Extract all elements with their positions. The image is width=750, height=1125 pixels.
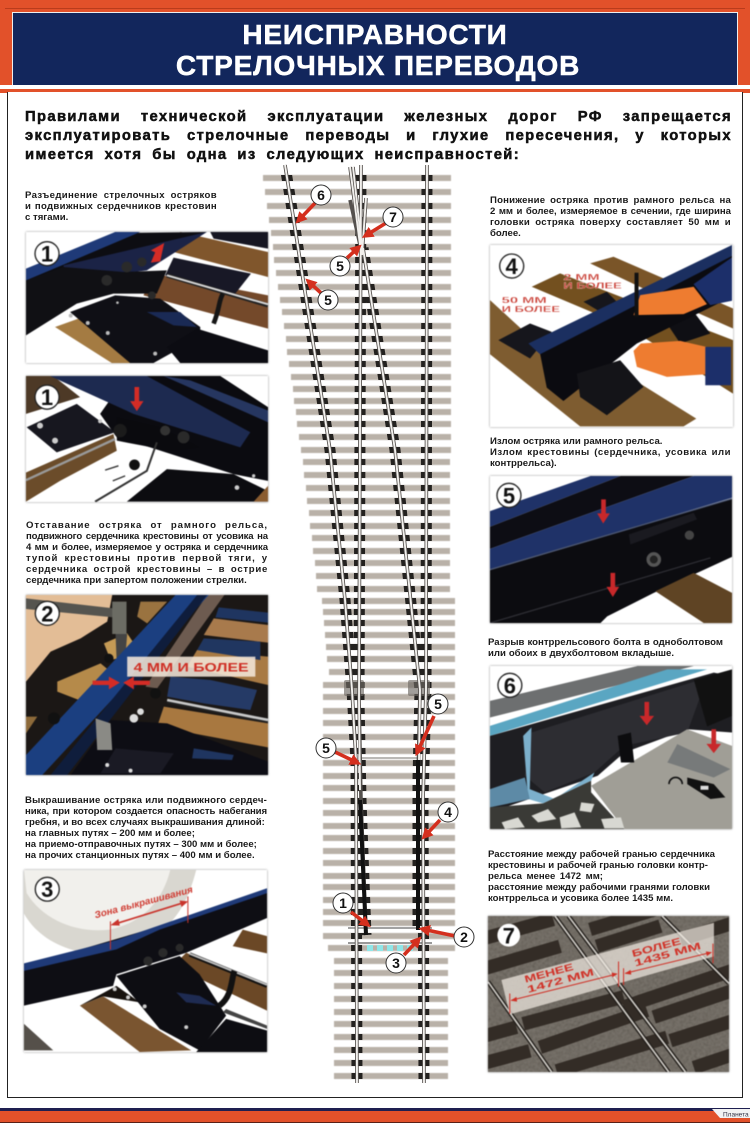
measurement arrows xyxy=(510,944,713,1014)
bottom band xyxy=(0,1108,750,1123)
text: defect 5: Излом остряка или рамного рельса. xyxy=(490,436,662,447)
badge 4 xyxy=(500,254,524,279)
text: defect 3: Выкрашивание остряка или подвижного сердеч- xyxy=(25,795,267,806)
measurement label: 4 ММ И БОЛЕЕ xyxy=(134,662,249,675)
text: defect 2: сердечника острой крестовины – в острие xyxy=(26,564,268,575)
photo 7 xyxy=(488,916,729,1072)
text: defect 6: Разрыв контррельсового болта в одноболтовом xyxy=(488,637,723,648)
text: defect 6 xyxy=(488,637,723,659)
callout numbers: 5 xyxy=(324,292,332,308)
badge 7: 7 xyxy=(503,923,515,948)
measurement labels: И БОЛЕЕ xyxy=(563,280,623,290)
badge 5 xyxy=(497,483,521,508)
badge 2 xyxy=(35,601,59,626)
top orange frame xyxy=(0,0,750,93)
text: defect 4: Понижение остряка против рамного рельса на xyxy=(490,195,731,206)
measurement labels: 2 ММ xyxy=(563,272,600,282)
callout numbers: 3 xyxy=(392,955,400,971)
text: defect 1 xyxy=(25,190,217,223)
text: defect 3: на приемо-отправочных путях – 300 мм и более; xyxy=(25,839,257,850)
text: defect 7: крестовины и рабочей гранью головки контр- xyxy=(488,860,708,871)
photo 1b xyxy=(26,376,268,502)
badge 3: 3 xyxy=(41,877,53,902)
callout numbers xyxy=(317,187,468,971)
measurement labels xyxy=(523,936,702,996)
arrow xyxy=(151,243,164,263)
text: defect 2: 4 мм и более, измеряемое у остряка и сердечника xyxy=(26,542,268,553)
text: defect 6: или обоих в двухболтовом вкладыше. xyxy=(488,648,674,659)
measurement labels: 50 ММ xyxy=(502,295,547,305)
publisher logo: Планета xyxy=(723,1112,749,1118)
text: defect 2: подвижного сердечника крестовины от усовика на xyxy=(26,531,268,542)
sleepers xyxy=(263,175,455,1079)
text: defect 1: с тягами. xyxy=(25,212,68,223)
track diagram xyxy=(262,164,474,1083)
callout numbers: 5 xyxy=(336,258,344,274)
measurement label xyxy=(127,657,255,677)
text: defect 5: Излом крестовины (сердечника, усовика или xyxy=(490,447,731,458)
text: defect 4 xyxy=(490,195,731,239)
callout numbers: 1 xyxy=(339,895,347,911)
callout numbers: 6 xyxy=(317,187,325,203)
text: defect 3: ника, при котором создается опасность набегания xyxy=(25,806,267,817)
callout numbers: 5 xyxy=(434,696,442,712)
callout numbers: 7 xyxy=(389,209,397,225)
measurement arrows xyxy=(93,677,150,689)
text: defect 4: головки остряка поверху составляет 50 мм и xyxy=(490,217,731,228)
photo 1a xyxy=(26,232,268,363)
text: defect 2: тупой крестовины против первой тяги, у xyxy=(26,553,268,564)
badge 6 xyxy=(498,673,522,698)
badge 1 xyxy=(35,242,59,267)
text: defect 7: Расстояние между рабочей гранью сердечника xyxy=(488,849,715,860)
arrow xyxy=(130,387,143,411)
title line strip xyxy=(0,85,750,89)
text: defect 2 xyxy=(26,520,268,586)
callout numbers: 4 xyxy=(444,804,452,820)
chipping zone annotation xyxy=(93,884,195,949)
marker dots xyxy=(367,945,413,951)
title xyxy=(176,19,580,82)
intro text: Правилами технической эксплуатации железных дорог РФ запрещается xyxy=(25,109,732,125)
text: defect 2: сердечника при запертом положении стрелки. xyxy=(26,575,247,586)
badge 1 xyxy=(35,385,59,410)
badge 1: 1 xyxy=(41,242,53,267)
publisher logo xyxy=(712,1109,750,1118)
callout arrows xyxy=(298,200,455,955)
text: defect 5: контррельса). xyxy=(490,458,557,469)
photo 5 xyxy=(490,476,732,623)
title: СТРЕЛОЧНЫХ ПЕРЕВОДОВ xyxy=(176,50,580,81)
photo 2 xyxy=(26,595,268,775)
text: defect 3: на главных путях – 200 мм и более; xyxy=(25,828,195,839)
measurement labels xyxy=(502,272,623,314)
text: defect 4: более. xyxy=(490,228,521,239)
rail fasteners xyxy=(285,165,427,1083)
measurement labels: БОЛЕЕ xyxy=(631,936,683,960)
badge 6: 6 xyxy=(504,673,516,698)
badge 4: 4 xyxy=(506,254,519,279)
arrows xyxy=(640,702,721,753)
cross rods xyxy=(348,758,432,943)
measurement labels: 1472 ММ xyxy=(526,967,595,996)
measurement band xyxy=(501,923,714,1014)
rails xyxy=(285,165,427,1083)
text: defect 7: расстояние между рабочими гранями головки xyxy=(488,882,710,893)
title banner xyxy=(13,13,737,85)
photo 3 xyxy=(24,870,267,1052)
text: defect 7: рельса менее 1472 мм; xyxy=(488,871,603,882)
intro text xyxy=(25,109,732,163)
callout badges xyxy=(311,185,474,973)
badge 5: 5 xyxy=(503,483,515,508)
text: defect 5 xyxy=(490,436,731,469)
badge 1: 1 xyxy=(41,385,53,410)
text: defect 3: гребня, и во всех случаях выкрашивания длиной: xyxy=(25,817,265,828)
arrows xyxy=(597,499,619,597)
measurement labels: 1435 ММ xyxy=(633,941,702,969)
text: defect 3: на прочих станционных путях – 400 мм и более. xyxy=(25,850,255,861)
text: defect 1: Разъединение стрелочных остряков xyxy=(25,190,217,201)
text: defect 3 xyxy=(25,795,267,861)
text: defect 2: Отставание остряка от рамного рельса, xyxy=(26,520,268,531)
measurement labels: И БОЛЕЕ xyxy=(502,304,561,314)
text: defect 1: и подвижных сердечников крестовин xyxy=(25,201,217,212)
badge 7 xyxy=(497,923,520,948)
intro text: эксплуатировать стрелочные переводы и глухие пересечения, у которых xyxy=(25,128,732,144)
chipping zone annotation: Зона выкрашивания xyxy=(93,884,195,921)
intro text: имеется хотя бы одна из следующих неисправностей: xyxy=(25,147,520,163)
photo 4 xyxy=(490,245,733,427)
measurement labels: МЕНЕЕ xyxy=(523,962,575,986)
badge 2: 2 xyxy=(41,601,53,626)
text: defect 7 xyxy=(488,849,715,904)
switch pads xyxy=(344,680,430,696)
title: НЕИСПРАВНОСТИ xyxy=(242,19,508,50)
callout numbers: 5 xyxy=(322,740,330,756)
badge 3 xyxy=(35,877,59,902)
text: defect 4: 2 мм и более, измеряемое в сечении, где ширина xyxy=(490,206,731,217)
callout numbers: 2 xyxy=(460,929,468,945)
text: defect 7: контррельса и усовика более 1435 мм. xyxy=(488,893,673,904)
photo 6 xyxy=(490,666,732,829)
